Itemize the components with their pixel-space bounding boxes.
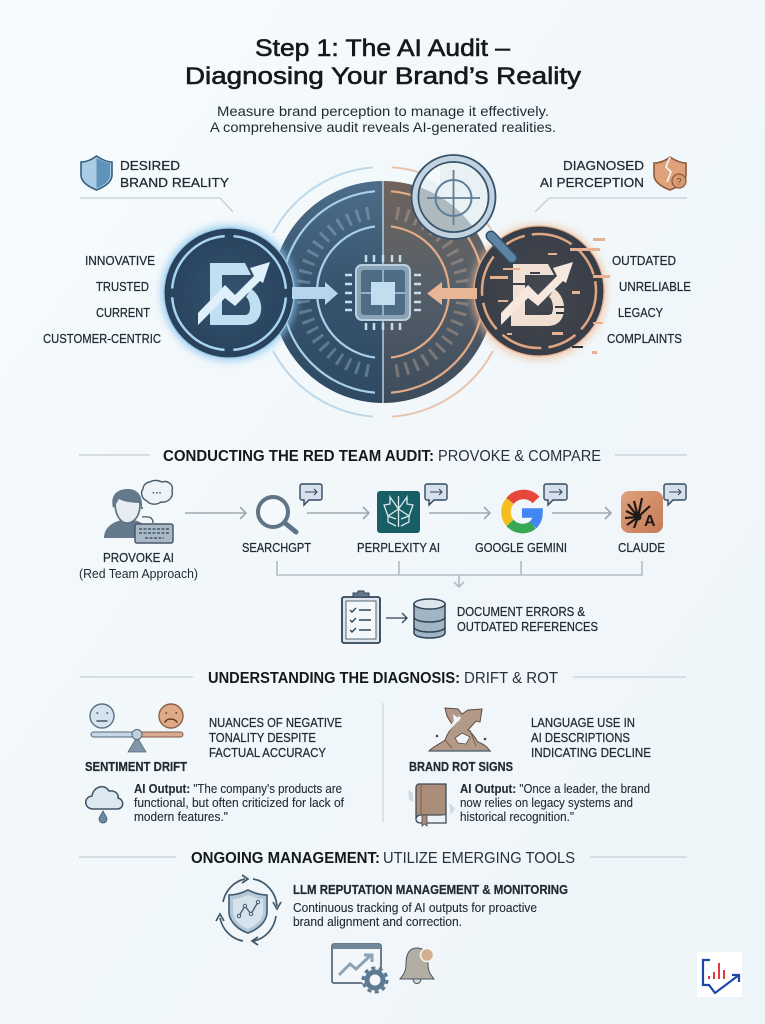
section heading: red team audit: CONDUCTING THE RED TEAM AUDIT: xyxy=(163,448,434,465)
icon: cracked shield: ? xyxy=(676,176,682,186)
icon: person at keyboard with speech bubble: ··· xyxy=(152,488,162,499)
tool labels: GOOGLE GEMINI xyxy=(475,540,567,555)
text: language use xyxy=(531,715,651,760)
section heading: red team audit xyxy=(79,448,687,465)
arrow 4 xyxy=(552,507,611,519)
panel: brand reality versus AI perception diagram xyxy=(43,155,691,417)
section heading: drift and rot xyxy=(80,670,686,687)
icon: SearchGPT magnifier xyxy=(258,497,296,532)
subtitle: A comprehensive audit reveals AI-generated realities. xyxy=(210,119,556,135)
label: sentiment drift: SENTIMENT DRIFT xyxy=(85,759,187,774)
label: provoke AI xyxy=(79,550,198,581)
heading: desired brand reality: BRAND REALITY xyxy=(120,175,229,190)
diagnosed attribute list: UNRELIABLE xyxy=(619,279,691,294)
outer arcs xyxy=(273,167,493,417)
quote: sentiment drift AI output: AI Output: "The company's products are xyxy=(134,782,342,796)
text: LLM reputation management: LLM REPUTATION MANAGEMENT & MONITORING xyxy=(293,882,568,897)
quote: brand rot AI output xyxy=(460,782,650,824)
subtitle xyxy=(210,103,556,135)
quote: sentiment drift AI output: modern features." xyxy=(134,810,228,824)
tool labels: SEARCHGPT xyxy=(242,540,311,555)
section heading: ongoing management: ONGOING MANAGEMENT: xyxy=(191,850,380,867)
title xyxy=(185,35,581,90)
tool labels: PERPLEXITY AI xyxy=(357,540,440,555)
panel: red team audit flow xyxy=(79,480,686,643)
section heading: ongoing management xyxy=(79,850,687,867)
quote: brand rot AI output: historical recognition." xyxy=(460,810,574,824)
section heading: drift and rot: DRIFT & ROT xyxy=(464,670,558,687)
icon: redirect bubble 2 xyxy=(425,484,447,505)
section heading: drift and rot: UNDERSTANDING THE DIAGNOSIS: xyxy=(208,670,460,687)
label: document errors: DOCUMENT ERRORS & xyxy=(457,604,585,619)
arrow 1 xyxy=(185,507,246,519)
heading: diagnosed AI perception: DIAGNOSED xyxy=(563,158,644,173)
text: language use: INDICATING DECLINE xyxy=(531,745,651,760)
text: negative tonality nuances xyxy=(209,715,342,760)
quote: brand rot AI output: AI Output: "Once a leader, the brand xyxy=(460,782,650,796)
icon: clipboard checklist xyxy=(342,591,380,643)
desired attribute list: CURRENT xyxy=(96,305,150,320)
desired attribute list: INNOVATIVE xyxy=(85,253,155,268)
desired attribute list xyxy=(43,253,161,346)
section heading: red team audit: PROVOKE & COMPARE xyxy=(438,448,601,465)
diagnosed attribute list: COMPLAINTS xyxy=(607,331,682,346)
icon: Google G xyxy=(506,494,538,529)
text: language use: AI DESCRIPTIONS xyxy=(531,730,630,745)
title: Step 1: The AI Audit – xyxy=(255,35,511,62)
desired attribute list: TRUSTED xyxy=(96,279,149,294)
collector bracket xyxy=(277,561,642,587)
quote: sentiment drift AI output: functional, but often criticized for lack of xyxy=(134,796,344,810)
icon: redirect bubble 4 xyxy=(664,484,686,505)
panel: ongoing management xyxy=(216,875,568,993)
icon: redirect bubble 3 xyxy=(544,484,567,505)
icon: worn book xyxy=(408,784,455,826)
text: LLM reputation management: brand alignment and correction. xyxy=(293,915,462,929)
quote: sentiment drift AI output xyxy=(134,782,344,824)
icon: sentiment balance scale xyxy=(90,704,183,752)
heading: desired brand reality: DESIRED xyxy=(120,158,180,173)
diagnosed attribute list: OUTDATED xyxy=(612,253,676,268)
central split disc xyxy=(272,181,494,403)
heading: desired brand reality xyxy=(120,158,229,190)
text: negative tonality nuances: TONALITY DESPITE xyxy=(209,730,316,745)
icon: Claude logo xyxy=(621,491,663,533)
icon: database xyxy=(414,599,445,638)
icon: redirect bubble 1 xyxy=(300,484,322,505)
icon: crumbling brand logo xyxy=(429,708,491,751)
section heading: ongoing management: UTILIZE EMERGING TOOLS xyxy=(383,850,575,867)
icon: rain cloud xyxy=(86,787,123,823)
label: provoke AI: PROVOKE AI xyxy=(103,550,174,565)
logo badge xyxy=(697,952,742,997)
icon: analytics window with gear xyxy=(332,944,388,993)
icon: desired shield xyxy=(81,156,112,190)
brand badge: desired xyxy=(161,225,297,361)
arrow 3 xyxy=(429,507,490,519)
text: negative tonality nuances: FACTUAL ACCURACY xyxy=(209,745,326,760)
icon: shield with monitoring ring xyxy=(216,875,281,945)
heading: diagnosed AI perception: AI PERCEPTION xyxy=(540,175,644,190)
quote: brand rot AI output: now relies on legacy systems and xyxy=(460,796,633,810)
diagnosed attribute list xyxy=(607,253,691,346)
icon: magnifying glass with target xyxy=(410,154,518,264)
desired attribute list: CUSTOMER-CENTRIC xyxy=(43,331,161,346)
label: document errors xyxy=(457,604,598,634)
arrow: clipboard to database xyxy=(386,613,407,623)
text: LLM reputation management xyxy=(293,882,568,929)
text: LLM reputation management: Continuous tracking of AI outputs for proactive xyxy=(293,901,537,915)
tool labels: CLAUDE xyxy=(618,540,665,555)
icon: Perplexity logo xyxy=(377,491,420,533)
arrow: diagnosed to chip xyxy=(427,282,477,305)
label: provoke AI: (Red Team Approach) xyxy=(79,566,198,581)
icon: notification bell xyxy=(400,948,434,984)
tool labels xyxy=(242,540,665,555)
diagnosed attribute list: LEGACY xyxy=(618,305,663,320)
text: negative tonality nuances: NUANCES OF NEGATIVE xyxy=(209,715,342,730)
panel: brand rot xyxy=(408,708,651,826)
heading: diagnosed AI perception xyxy=(540,158,644,190)
icon: Claude logo: A xyxy=(644,513,656,530)
icon: AI chip xyxy=(345,255,421,330)
panel: sentiment drift xyxy=(85,704,344,824)
label: document errors: OUTDATED REFERENCES xyxy=(457,619,598,634)
arrow: desired to chip xyxy=(292,282,338,305)
label: brand rot signs: BRAND ROT SIGNS xyxy=(409,759,513,774)
arrow 2 xyxy=(307,507,369,519)
subtitle: Measure brand perception to manage it effectively. xyxy=(217,103,549,119)
brand badge: diagnosed, glitched xyxy=(471,224,610,360)
text: language use: LANGUAGE USE IN xyxy=(531,715,635,730)
icon: cracked shield xyxy=(654,157,686,190)
title: Diagnosing Your Brand’s Reality xyxy=(185,63,581,90)
icon: person at keyboard with speech bubble xyxy=(104,480,173,543)
